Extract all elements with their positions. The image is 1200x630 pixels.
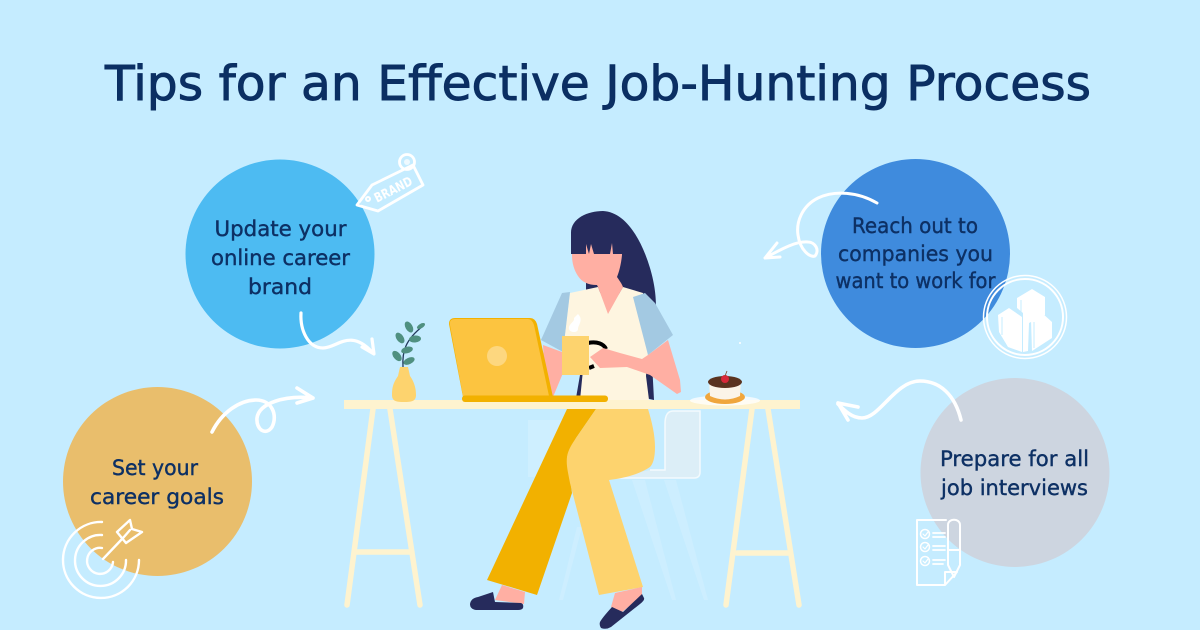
panel: update your online career brand: online career (211, 246, 350, 270)
desk (344, 400, 800, 605)
panel: update your online career brand (186, 160, 374, 348)
right foot (611, 587, 642, 612)
panel: set your career goals: Set your (112, 456, 198, 480)
panel: reach out to companies: companies you (838, 242, 993, 266)
panel: update your online career brand: brand (248, 275, 312, 299)
sleeves (541, 292, 570, 352)
hair back (571, 211, 656, 308)
arrow: brand to desk (301, 313, 374, 354)
steam (569, 314, 581, 332)
panel: prepare for all job interviews: Prepare for all (940, 447, 1089, 471)
panel: prepare for all job interviews: job interviews (940, 476, 1088, 500)
icon: brand tag (357, 154, 423, 211)
icon: target with dart (63, 520, 142, 598)
panel: update your online career brand: Update your (214, 217, 347, 241)
arrow: goals loop to desk (212, 388, 313, 432)
arrow: companies loop to desk (765, 193, 877, 258)
person (449, 211, 681, 629)
icon: checklist with pen (917, 520, 960, 585)
mug (562, 336, 589, 375)
face and neck (572, 240, 623, 314)
dessert on plate (690, 342, 760, 406)
laptop (449, 318, 553, 397)
fringe (571, 213, 622, 254)
title: Tips for an Effective Job-Hunting Process (104, 56, 1091, 112)
icon: office buildings (984, 276, 1066, 358)
dark trouser leg (487, 409, 596, 595)
left foot (495, 585, 525, 604)
panel: reach out to companies (821, 159, 1010, 348)
arrow: interviews to desk (838, 381, 961, 420)
panel: reach out to companies: want to work for (836, 269, 996, 293)
right arm (590, 340, 681, 394)
left arm (543, 345, 563, 397)
panel: prepare for all job interviews (920, 378, 1110, 567)
vase with plant (390, 320, 426, 402)
mug handle (588, 342, 606, 368)
panel: set your career goals (63, 387, 252, 576)
panel: reach out to companies: Reach out to (852, 214, 978, 238)
panel: set your career goals: career goals (90, 485, 224, 509)
chair (528, 411, 708, 600)
torso vest (563, 287, 649, 400)
light trouser leg (567, 409, 655, 595)
icon: brand tag: BRAND (372, 174, 415, 206)
